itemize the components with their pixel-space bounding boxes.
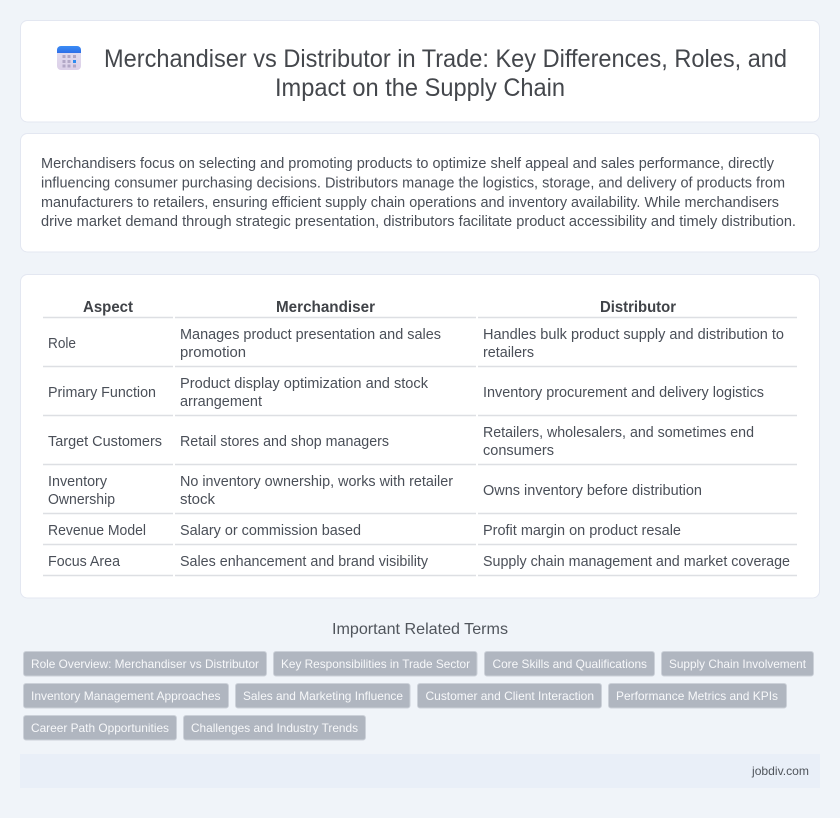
icon: calendar <box>57 46 81 70</box>
row: inventory ownership: Ownership <box>48 492 115 508</box>
row: role <box>48 327 784 361</box>
row: revenue model: Revenue Model <box>48 523 146 539</box>
row: revenue model: Profit margin on product resale <box>483 523 681 539</box>
related terms tags: Challenges and Industry Trends <box>191 721 358 735</box>
title: Merchandiser vs Distributor in Trade: Key Differences, Roles, and <box>104 46 787 73</box>
table header row: Aspect <box>83 299 134 316</box>
row: inventory ownership: stock <box>180 492 216 508</box>
footer bar <box>20 754 820 788</box>
table header row <box>83 299 676 316</box>
related terms tags: Supply Chain Involvement <box>669 657 807 671</box>
row: target customers: Retail stores and shop managers <box>180 434 389 450</box>
related terms tags: Key Responsibilities in Trade Sector <box>281 657 470 671</box>
row: primary function: Primary Function <box>48 385 156 401</box>
title <box>104 46 787 102</box>
table header row: Merchandiser <box>276 299 375 316</box>
related terms tags: Role Overview: Merchandiser vs Distributor <box>31 657 259 671</box>
row: inventory ownership: No inventory ownership, works with retailer <box>180 474 453 490</box>
row: target customers: consumers <box>483 443 554 459</box>
intro paragraph: influencing consumer purchasing decisions. Distributors manage the logistics, storage, and delivery of products from <box>41 176 785 192</box>
intro paragraph <box>41 156 796 230</box>
title: Impact on the Supply Chain <box>275 75 565 102</box>
row: target customers: Target Customers <box>48 434 162 450</box>
row: role: promotion <box>180 345 246 361</box>
related terms tags: Career Path Opportunities <box>31 721 169 735</box>
row: focus area <box>48 554 790 570</box>
row: primary function: Product display optimization and stock <box>180 376 429 392</box>
row: revenue model: Salary or commission based <box>180 523 361 539</box>
related terms tags: Sales and Marketing Influence <box>243 689 403 703</box>
related terms tags: Core Skills and Qualifications <box>492 657 647 671</box>
row: role: Role <box>48 336 76 352</box>
row: focus area: Supply chain management and market coverage <box>483 554 790 570</box>
row: role: retailers <box>483 345 534 361</box>
intro paragraph: Merchandisers focus on selecting and promoting products to optimize shelf appeal and sales performance, directly <box>41 156 775 172</box>
row: inventory ownership <box>48 474 702 508</box>
comparison table panel <box>20 274 820 598</box>
related terms tags <box>24 652 814 740</box>
footer source text: jobdiv.com <box>751 764 809 778</box>
row: primary function: Inventory procurement and delivery logistics <box>483 385 764 401</box>
row: role: Handles bulk product supply and distribution to <box>483 327 784 343</box>
table header row: Distributor <box>600 299 676 316</box>
intro paragraph: manufacturers to retailers, ensuring efficient supply chain operations and inventory availability. While merchandisers <box>41 195 779 211</box>
related terms heading: Important Related Terms <box>332 621 508 638</box>
row: focus area: Sales enhancement and brand visibility <box>180 554 429 570</box>
intro paragraph: drive market demand through strategic presentation, distributors facilitate product accessibility and timely distribution. <box>41 214 796 230</box>
related terms tags: Customer and Client Interaction <box>426 689 594 703</box>
row: primary function: arrangement <box>180 394 262 410</box>
row: primary function <box>48 376 764 410</box>
related terms tags: Inventory Management Approaches <box>31 689 221 703</box>
row: inventory ownership: Inventory <box>48 474 108 490</box>
row: target customers <box>48 425 754 459</box>
row: inventory ownership: Owns inventory before distribution <box>483 483 702 499</box>
row: target customers: Retailers, wholesalers, and sometimes end <box>483 425 754 441</box>
row: focus area: Focus Area <box>48 554 120 570</box>
related terms tags: Performance Metrics and KPIs <box>616 689 778 703</box>
row: revenue model <box>48 523 681 539</box>
intro text panel <box>20 134 820 252</box>
row: role: Manages product presentation and sales <box>180 327 441 343</box>
header panel <box>20 20 820 122</box>
